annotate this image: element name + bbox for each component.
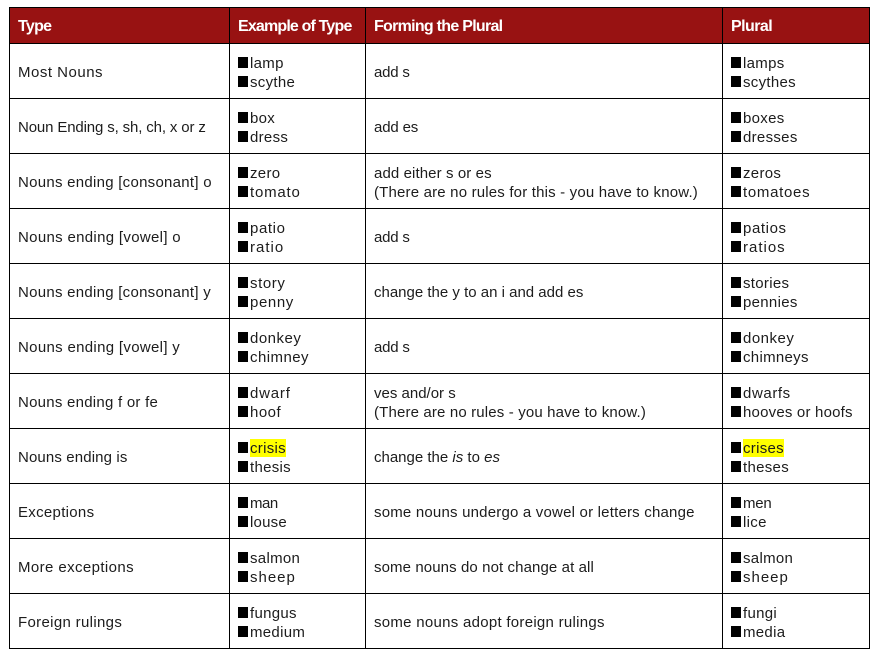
row: nouns ending consonant o: (There are no rules for this - you have to know.) — [374, 184, 698, 201]
row: more exceptions: salmon — [743, 550, 793, 567]
row: nouns ending consonant o: tomato — [250, 184, 301, 201]
row: nouns ending consonant o — [18, 165, 810, 201]
row: most nouns: Most Nouns — [18, 64, 103, 81]
row: most nouns: add s — [374, 64, 410, 81]
row: nouns ending vowel y — [18, 330, 809, 366]
row: nouns ending f or fe: (There are no rules - you have to know.) — [374, 404, 646, 421]
row: nouns ending is: thesis — [250, 459, 291, 476]
row: nouns ending is — [18, 439, 789, 476]
row: nouns ending f or fe: hooves or hoofs — [743, 404, 853, 421]
row: foreign rulings: media — [743, 624, 785, 641]
row: more exceptions: salmon — [250, 550, 300, 567]
row: nouns ending consonant y: change the y to an i and add es — [374, 284, 583, 301]
row: noun ending s, sh, ch, x or z: boxes — [743, 110, 785, 127]
row: nouns ending vowel o: patio — [250, 220, 286, 237]
row: noun ending s, sh, ch, x or z: add es — [374, 119, 418, 136]
row: exceptions: Exceptions — [18, 504, 94, 521]
row: nouns ending consonant y: stories — [743, 275, 789, 292]
row: nouns ending consonant o: zeros — [743, 165, 781, 182]
row: exceptions: some nouns undergo a vowel or letters change — [374, 504, 695, 521]
row: foreign rulings: fungus — [250, 605, 297, 622]
row: nouns ending vowel y: Nouns ending [vowel] y — [18, 339, 180, 356]
row: nouns ending is: crises — [743, 440, 784, 457]
row: nouns ending vowel o: patios — [743, 220, 787, 237]
row: nouns ending f or fe: hoof — [250, 404, 281, 421]
table header row: Forming the Plural — [374, 18, 502, 35]
row: noun ending s, sh, ch, x or z: Noun Ending s, sh, ch, x or z — [18, 119, 206, 136]
row: noun ending s, sh, ch, x or z — [18, 110, 798, 146]
table header row: Example of Type — [238, 18, 352, 35]
row: foreign rulings: medium — [250, 624, 305, 641]
row: nouns ending consonant o: tomatoes — [743, 184, 810, 201]
row: more exceptions: sheep — [250, 569, 296, 586]
row: nouns ending consonant o: zero — [250, 165, 280, 182]
row: more exceptions — [18, 550, 793, 586]
row: nouns ending vowel y: chimneys — [743, 349, 809, 366]
row: nouns ending vowel y: donkey — [250, 330, 301, 347]
row: foreign rulings: some nouns adopt foreign rulings — [374, 614, 605, 631]
row: most nouns: lamps — [743, 55, 785, 72]
row: nouns ending consonant o: add either s or es — [374, 165, 492, 182]
row: nouns ending consonant y: Nouns ending [consonant] y — [18, 284, 211, 301]
row: nouns ending vowel y: donkey — [743, 330, 794, 347]
row: nouns ending vowel o: ratio — [250, 239, 284, 256]
row: nouns ending consonant o: Nouns ending [consonant] o — [18, 174, 212, 191]
row: foreign rulings — [18, 605, 786, 641]
row: nouns ending consonant y: pennies — [743, 294, 798, 311]
row: nouns ending vowel y: chimney — [250, 349, 309, 366]
row: nouns ending f or fe: ves and/or s — [374, 385, 456, 402]
row: noun ending s, sh, ch, x or z: dresses — [743, 129, 798, 146]
row: nouns ending vowel o: add s — [374, 229, 410, 246]
row: nouns ending is: change the is to es — [374, 449, 500, 466]
row: more exceptions: some nouns do not change at all — [374, 559, 594, 576]
row: nouns ending f or fe: dwarfs — [743, 385, 791, 402]
row: nouns ending f or fe — [18, 385, 853, 421]
row: nouns ending vowel y: add s — [374, 339, 410, 356]
table header row — [9, 7, 870, 44]
row: nouns ending consonant y: penny — [250, 294, 294, 311]
row: nouns ending is: theses — [743, 459, 789, 476]
row: nouns ending vowel o: ratios — [743, 239, 786, 256]
row: more exceptions: More exceptions — [18, 559, 134, 576]
row: exceptions — [18, 495, 772, 531]
row: nouns ending consonant y — [18, 275, 798, 311]
row: foreign rulings: Foreign rulings — [18, 614, 122, 631]
table header row: Type — [18, 18, 51, 35]
row: foreign rulings: fungi — [743, 605, 777, 622]
table header row: Plural — [731, 18, 772, 35]
row: exceptions: louse — [250, 514, 287, 531]
row: nouns ending f or fe: Nouns ending f or fe — [18, 394, 158, 411]
row: most nouns: scythes — [743, 74, 796, 91]
row: exceptions: man — [250, 495, 278, 512]
row: exceptions: lice — [743, 514, 767, 531]
row: nouns ending consonant y: story — [250, 275, 286, 292]
row: most nouns: scythe — [250, 74, 295, 91]
row: nouns ending vowel o — [18, 220, 787, 256]
row: nouns ending is: Nouns ending is — [18, 449, 128, 466]
row: exceptions: men — [743, 495, 772, 512]
row: nouns ending vowel o: Nouns ending [vowel] o — [18, 229, 181, 246]
row: nouns ending f or fe: dwarf — [250, 385, 291, 402]
row: noun ending s, sh, ch, x or z: dress — [250, 129, 288, 146]
row: nouns ending is: crisis — [250, 440, 286, 457]
row: noun ending s, sh, ch, x or z: box — [250, 110, 275, 127]
row: more exceptions: sheep — [743, 569, 789, 586]
row: most nouns — [18, 55, 796, 91]
row: most nouns: lamp — [250, 55, 284, 72]
